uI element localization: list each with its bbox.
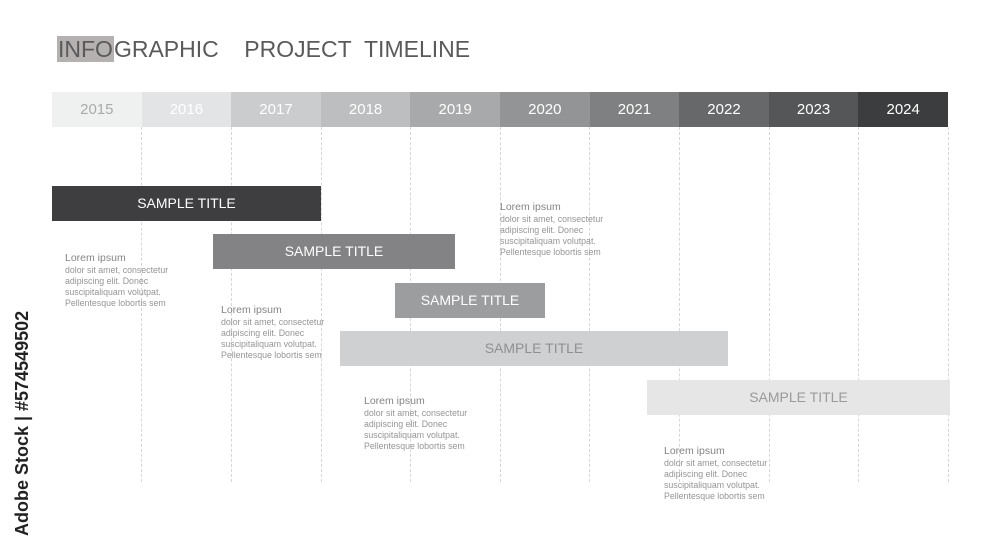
year band <box>52 92 948 127</box>
text block 4: suscipitaliquam volutpat. <box>364 430 460 440</box>
bar 2: SAMPLE TITLE <box>285 243 383 259</box>
bar 5: SAMPLE TITLE <box>749 389 848 405</box>
year band: 2023 <box>797 101 830 118</box>
text block 2: Lorem ipsum <box>221 304 282 316</box>
text block 4 <box>364 395 467 451</box>
text block 3: adipiscing elit. Donec <box>500 225 583 235</box>
text block 1: adipiscing elit. Donec <box>65 276 148 286</box>
year band: 2019 <box>438 101 472 118</box>
text block 5 <box>664 445 767 501</box>
year band: 2015 <box>80 101 113 118</box>
text block 2: adipiscing elit. Donec <box>221 328 304 338</box>
bar 4: SAMPLE TITLE <box>485 340 583 356</box>
text block 1: Lorem ipsum <box>65 252 126 264</box>
text block 3 <box>500 201 603 257</box>
text block 5: dolor sit amet, consectetur <box>664 458 767 468</box>
text block 4: Pellentesque lobortis sem <box>364 441 465 451</box>
text block 1: Pellentesque lobortis sem <box>65 298 166 308</box>
title: INFOGRAPHIC PROJECT TIMELINE <box>58 36 470 62</box>
bar 2 <box>213 234 455 269</box>
bar 3 <box>395 283 545 318</box>
text block 5: suscipitaliquam volutpat. <box>664 480 760 490</box>
bar 5 <box>647 380 950 415</box>
text block 2 <box>221 304 324 360</box>
text block 2: suscipitaliquam volutpat. <box>221 339 317 349</box>
text block 3: Lorem ipsum <box>500 201 561 213</box>
text block 4: Lorem ipsum <box>364 395 425 407</box>
text block 1 <box>65 252 168 308</box>
year band: 2021 <box>618 101 651 118</box>
bar 3: SAMPLE TITLE <box>421 292 519 308</box>
text block 1: suscipitaliquam volutpat. <box>65 287 161 297</box>
year band: 2018 <box>349 101 382 118</box>
bar 4 <box>340 331 728 366</box>
bar 1 <box>52 186 321 221</box>
text block 4: adipiscing elit. Donec <box>364 419 447 429</box>
text block 5: adipiscing elit. Donec <box>664 469 747 479</box>
text block 1: dolor sit amet, consectetur <box>65 265 168 275</box>
text block 5: Pellentesque lobortis sem <box>664 491 765 501</box>
year band: 2020 <box>528 101 561 118</box>
text block 3: dolor sit amet, consectetur <box>500 214 603 224</box>
year band: 2017 <box>259 101 293 118</box>
stock id vertical text: Adobe Stock | #574549502 <box>12 311 32 536</box>
year band: 2022 <box>707 101 741 118</box>
text block 2: dolor sit amet, consectetur <box>221 317 324 327</box>
text block 5: Lorem ipsum <box>664 445 725 457</box>
year band: 2016 <box>170 101 203 118</box>
bar 1: SAMPLE TITLE <box>137 195 236 211</box>
year band: 2024 <box>886 101 920 118</box>
text block 3: Pellentesque lobortis sem <box>500 247 601 257</box>
text block 4: dolor sit amet, consectetur <box>364 408 467 418</box>
text block 2: Pellentesque lobortis sem <box>221 350 322 360</box>
text block 3: suscipitaliquam volutpat. <box>500 236 596 246</box>
